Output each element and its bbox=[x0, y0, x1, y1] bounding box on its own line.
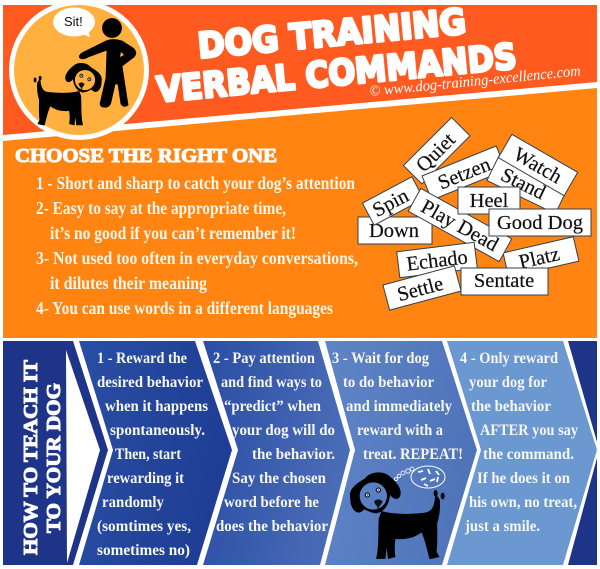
word cards bbox=[358, 117, 591, 310]
card: Watch: Watch bbox=[510, 143, 565, 188]
card: Spin bbox=[362, 177, 424, 225]
step 4 text: If he does it on bbox=[477, 470, 570, 487]
card: Sentate: Sentate bbox=[474, 270, 534, 292]
step 2 text: and find ways to bbox=[221, 374, 322, 391]
step 1 text: spontaneously. bbox=[110, 422, 205, 439]
step 4 text: his own, no treat, bbox=[469, 494, 577, 511]
card: Down bbox=[358, 217, 432, 244]
card: Spin: Spin bbox=[369, 185, 413, 222]
text block: criteria list: 1 - Short and sharp to catch your dog’s attention bbox=[36, 173, 355, 193]
step 4 text: the command. bbox=[483, 446, 574, 463]
card: Settle bbox=[383, 266, 461, 310]
step 2 text: your dog will do bbox=[232, 422, 335, 439]
step 3 text: to do behavior bbox=[343, 374, 434, 391]
chevron separators bbox=[73, 341, 600, 565]
card: Platz bbox=[503, 237, 579, 277]
card: Play Dead bbox=[408, 188, 512, 262]
man bbox=[79, 18, 136, 107]
step 2 text: the behavior. bbox=[252, 446, 335, 463]
chevron 2 bbox=[203, 341, 350, 565]
text block: criteria list: it dilutes their meaning bbox=[50, 273, 207, 293]
step 4 text: AFTER you say bbox=[480, 422, 578, 439]
card: Setzen: Setzen bbox=[435, 153, 494, 194]
title: DOG TRAINING bbox=[196, 2, 468, 67]
card: Platz: Platz bbox=[517, 243, 562, 274]
step 3 text: and immediately bbox=[346, 398, 452, 415]
vertical heading: TO YOUR DOG bbox=[43, 383, 65, 533]
panel: header banner bbox=[3, 5, 597, 135]
step 1 text: when it happens bbox=[105, 398, 208, 415]
heading: choose the right one: CHOOSE THE RIGHT ONE bbox=[15, 146, 277, 167]
step 3 text bbox=[332, 350, 463, 463]
step 2 text: “predict” when bbox=[224, 398, 321, 415]
card: Play Dead: Play Dead bbox=[417, 196, 502, 256]
card: Down: Down bbox=[369, 220, 419, 242]
thought bubble with bones bbox=[394, 466, 445, 488]
text block: criteria list: 4- You can use words in a different languages bbox=[36, 298, 333, 318]
step 4 text: the behavior bbox=[471, 398, 551, 415]
step 4 text: just a smile. bbox=[464, 518, 540, 535]
step 1 text: rewarding it bbox=[107, 470, 185, 487]
text block: criteria list bbox=[36, 173, 358, 318]
step 2 text: 2 - Pay attention bbox=[213, 350, 315, 367]
card: Quiet: Quiet bbox=[412, 129, 460, 177]
step 1 text: randomly bbox=[102, 494, 164, 511]
step 1 text: 1 - Reward the bbox=[97, 350, 187, 367]
card: Stand bbox=[487, 156, 567, 214]
step 2 text bbox=[213, 350, 335, 535]
card: Heel: Heel bbox=[470, 190, 509, 212]
card: Quiet bbox=[403, 117, 470, 184]
card: Echado: Echado bbox=[405, 246, 469, 276]
step 3 text: 3 - Wait for dog bbox=[332, 350, 429, 367]
icon: man commanding dog bbox=[9, 0, 149, 140]
chevron 1 bbox=[79, 341, 232, 565]
title bbox=[155, 2, 518, 111]
step 1 text bbox=[97, 350, 208, 559]
small dog bbox=[34, 63, 102, 125]
panel: how to teach it bbox=[3, 341, 597, 565]
card: Sentate bbox=[461, 268, 548, 295]
step 1 text: desired behavior bbox=[97, 374, 203, 391]
card: Setzen bbox=[422, 146, 506, 200]
step 1 text: (somtimes yes, bbox=[97, 518, 191, 535]
text block: criteria list: it’s no good if you can’t remember it! bbox=[50, 223, 296, 243]
chevron 3 bbox=[325, 341, 477, 565]
step 1 text: sometimes no) bbox=[97, 542, 190, 559]
step 4 text: your dog for bbox=[469, 374, 547, 391]
vertical heading bbox=[20, 359, 65, 555]
step 2 text: Say the chosen bbox=[232, 470, 326, 487]
step 2 text: does the behavior bbox=[216, 518, 328, 535]
icon: thinking dog bbox=[350, 466, 445, 559]
step 3 text: reward with a bbox=[357, 422, 443, 439]
text block: criteria list: 3- Not used too often in everyday conversations, bbox=[36, 248, 358, 268]
card: Settle: Settle bbox=[395, 273, 446, 306]
card: Good Dog: Good Dog bbox=[497, 212, 583, 234]
chevron 4 bbox=[447, 341, 597, 565]
right corner top bbox=[568, 341, 597, 442]
step 3 text: treat. REPEAT! bbox=[363, 446, 463, 463]
card: Watch bbox=[498, 134, 578, 196]
step 1 text: Then, start bbox=[115, 446, 182, 463]
step 4 text bbox=[460, 350, 578, 535]
vertical heading: HOW TO TEACH IT bbox=[20, 359, 42, 555]
right corner bottom bbox=[568, 458, 597, 565]
card: Good Dog bbox=[489, 209, 591, 236]
speech bubble: Sit! bbox=[64, 14, 83, 29]
title: VERBAL COMMANDS bbox=[155, 37, 518, 111]
step 4 text: 4 - Only reward bbox=[460, 350, 558, 367]
white arrow bbox=[66, 350, 100, 563]
card: Stand: Stand bbox=[497, 164, 549, 204]
card: Heel bbox=[458, 187, 520, 214]
panel: choose the right one bbox=[3, 88, 597, 338]
card: Echado bbox=[397, 242, 477, 278]
text block: criteria list: 2- Easy to say at the appropriate time, bbox=[36, 198, 286, 218]
website credit: © www.dog-training-excellence.com bbox=[369, 63, 582, 100]
step 2 text: word before he bbox=[224, 494, 319, 511]
